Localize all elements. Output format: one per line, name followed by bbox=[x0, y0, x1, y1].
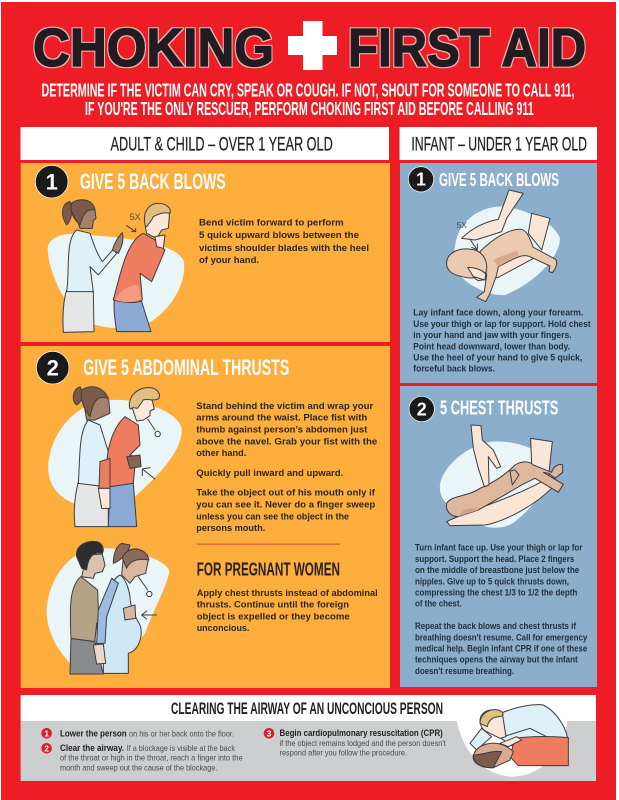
title: CHOKING bbox=[33, 18, 274, 78]
step text: in your hand and jaw with your fingers. bbox=[413, 330, 572, 340]
step text: Repeat the back blows and chest thrusts if bbox=[415, 621, 577, 631]
step number 1 bbox=[408, 167, 434, 192]
step text: medical help. Begin infant CPR if one of these bbox=[415, 643, 587, 653]
step text: Bend victim forward to perform bbox=[199, 218, 344, 229]
illustration: abdominal thrusts bbox=[48, 387, 182, 527]
pregnant women text bbox=[197, 588, 378, 634]
title: FIRST AID bbox=[348, 18, 586, 78]
step heading: GIVE 5 BACK BLOWS bbox=[80, 169, 226, 194]
illustration: back blows bbox=[48, 200, 184, 332]
step text: Quickly pull inward and upward. bbox=[196, 468, 343, 479]
step 3: Begin cardiopulmonary resuscitation (CPR) bbox=[280, 728, 443, 738]
step text: Use the heel of your hand to give 5 quick, bbox=[413, 352, 582, 362]
panel heading: CLEARING THE AIRWAY OF AN UNCONCIOUS PERSON bbox=[171, 700, 443, 718]
step number 2: 2 bbox=[417, 399, 427, 419]
step number 1: 1 bbox=[416, 170, 426, 190]
step text: doesn't resume breathing. bbox=[415, 666, 514, 676]
step text: victims shoulder blades with the heel bbox=[199, 243, 369, 254]
pregnant women text: object is expelled or they become bbox=[197, 611, 350, 622]
step 2 bbox=[41, 743, 243, 773]
step text: on the middle of breastbone just below the bbox=[415, 565, 579, 575]
step 1 bbox=[41, 728, 234, 739]
step 2: month and sweep out the cause of the blockage. bbox=[60, 763, 217, 773]
step text: of the chest. bbox=[415, 599, 462, 609]
step 2: Clear the airway. bbox=[60, 743, 124, 753]
step heading: 5 CHEST THRUSTS bbox=[440, 397, 558, 419]
pregnant women text: unconcious. bbox=[197, 623, 249, 634]
step text: Take the object out of his mouth only if bbox=[196, 488, 376, 499]
illustration: infant chest thrusts bbox=[440, 425, 563, 528]
step text: support. Support the head. Place 2 fingers bbox=[415, 554, 574, 564]
step text bbox=[413, 308, 591, 374]
step heading: GIVE 5 ABDOMINAL THRUSTS bbox=[83, 355, 289, 380]
illustration: rescue breathing bbox=[457, 705, 568, 777]
step text: unless you can see the object in the bbox=[196, 511, 349, 522]
panel: adult step 2 abdominal thrusts bbox=[21, 346, 390, 688]
intro instructions bbox=[42, 80, 574, 119]
step text: 5 quick upward blows between the bbox=[199, 230, 359, 241]
title bbox=[33, 18, 586, 78]
step 2: 2 bbox=[44, 744, 49, 754]
pregnant women text: thrusts. Continue until the foreign bbox=[197, 600, 349, 611]
step 3 bbox=[264, 728, 446, 758]
step text: compressing the chest 1/3 to 1/2 the depth bbox=[415, 587, 578, 597]
step text: of your hand. bbox=[199, 255, 259, 266]
step 1: on his or her back onto the floor. bbox=[129, 728, 234, 738]
step text: breathing doesn't resume. Call for emergency bbox=[415, 632, 588, 642]
step text: arms around the waist. Place fist with bbox=[196, 413, 367, 424]
step text: Use your thigh or lap for support. Hold chest bbox=[413, 319, 591, 329]
panel: infant step 1 back blows bbox=[400, 163, 597, 383]
step 2: of the throat or high in the throat, reach a finger into the bbox=[60, 753, 243, 763]
step number 2: 2 bbox=[47, 356, 59, 380]
illustration: pregnant woman chest thrusts bbox=[47, 541, 169, 674]
panel: adult step 1 back blows bbox=[21, 163, 390, 342]
step text: techniques opens the airway but the infant bbox=[415, 655, 578, 665]
step text: Point head downward, lower than body. bbox=[413, 341, 570, 351]
illustration: infant back blows: 5X bbox=[457, 220, 467, 230]
panel: infant step 2 chest thrusts bbox=[400, 386, 597, 687]
step number 1 bbox=[35, 165, 68, 198]
step 3: 3 bbox=[267, 728, 272, 738]
step number 2 bbox=[36, 351, 69, 384]
illustration: back blows: 5X bbox=[130, 212, 141, 222]
step 3: if the object remains lodged and the person doesn't bbox=[280, 738, 446, 748]
step text bbox=[415, 543, 588, 676]
step text bbox=[196, 401, 377, 534]
step 1: 1 bbox=[44, 728, 49, 738]
step text: Turn infant face up. Use your thigh or lap for bbox=[415, 543, 583, 553]
step text: you can see it. Never do a finger sweep bbox=[196, 499, 375, 510]
pregnant women text: Apply chest thrusts instead of abdominal bbox=[197, 588, 378, 599]
column heading: adult and child bbox=[20, 127, 389, 160]
column heading: infant bbox=[400, 127, 597, 160]
illustration: infant back blows bbox=[447, 190, 560, 302]
step number 2 bbox=[409, 396, 434, 422]
step text: persons mouth. bbox=[196, 523, 265, 534]
step number 1: 1 bbox=[46, 170, 58, 194]
step text: forceful back blows. bbox=[413, 364, 495, 374]
step text: thumb against person’s abdomen just bbox=[196, 425, 368, 436]
step text: nipples. Give up to 5 quick thrusts down, bbox=[415, 576, 569, 586]
icon: white medical cross bbox=[288, 21, 337, 70]
step 3: respond after you follow the procedure. bbox=[280, 748, 407, 758]
step text: Stand behind the victim and wrap your bbox=[196, 401, 374, 412]
panel: clearing the airway bbox=[21, 695, 596, 781]
subheading: for pregnant women: FOR PREGNANT WOMEN bbox=[197, 559, 340, 579]
column heading: adult and child: ADULT & CHILD – OVER 1 YEAR OLD bbox=[110, 135, 333, 156]
step 2: If a blockage is visible at the back bbox=[127, 743, 236, 753]
step text bbox=[199, 218, 369, 266]
step text: Lay infant face down, along your forearm. bbox=[413, 308, 583, 318]
step 1: Lower the person bbox=[60, 728, 127, 738]
step text: other hand. bbox=[196, 448, 246, 459]
step text: above the navel. Grab your fist with the bbox=[196, 436, 377, 447]
